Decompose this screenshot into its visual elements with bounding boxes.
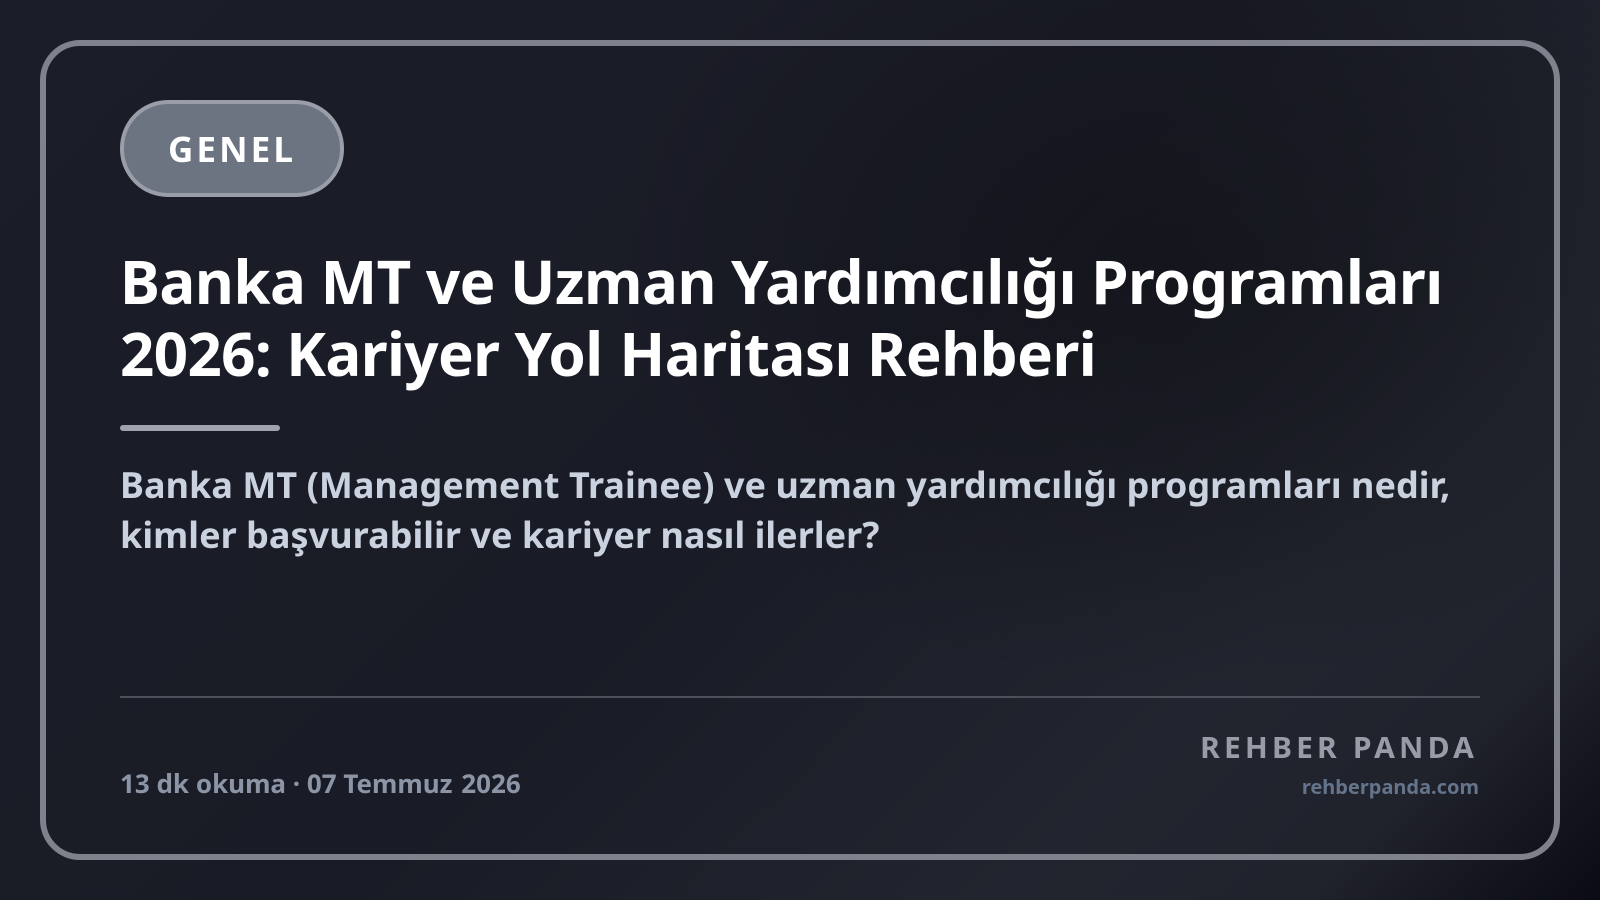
accent rule xyxy=(120,425,280,431)
reading time and date: 13 dk okuma · 07 Temmuz 2026 xyxy=(120,765,521,801)
title: 2026: Kariyer Yol Haritası Rehberi xyxy=(120,312,1096,394)
subtitle: kimler başvurabilir ve kariyer nasıl ilerler? xyxy=(120,510,880,559)
subtitle xyxy=(120,460,1450,559)
category badge: GENEL xyxy=(168,126,296,173)
divider xyxy=(120,696,1480,698)
title xyxy=(120,240,1443,394)
category badge xyxy=(120,100,344,197)
brand name: REHBER PANDA xyxy=(1200,726,1478,767)
title: Banka MT ve Uzman Yardımcılığı Programları xyxy=(120,240,1443,322)
subtitle: Banka MT (Management Trainee) ve uzman yardımcılığı programları nedir, xyxy=(120,460,1450,509)
website: rehberpanda.com xyxy=(1302,773,1479,800)
